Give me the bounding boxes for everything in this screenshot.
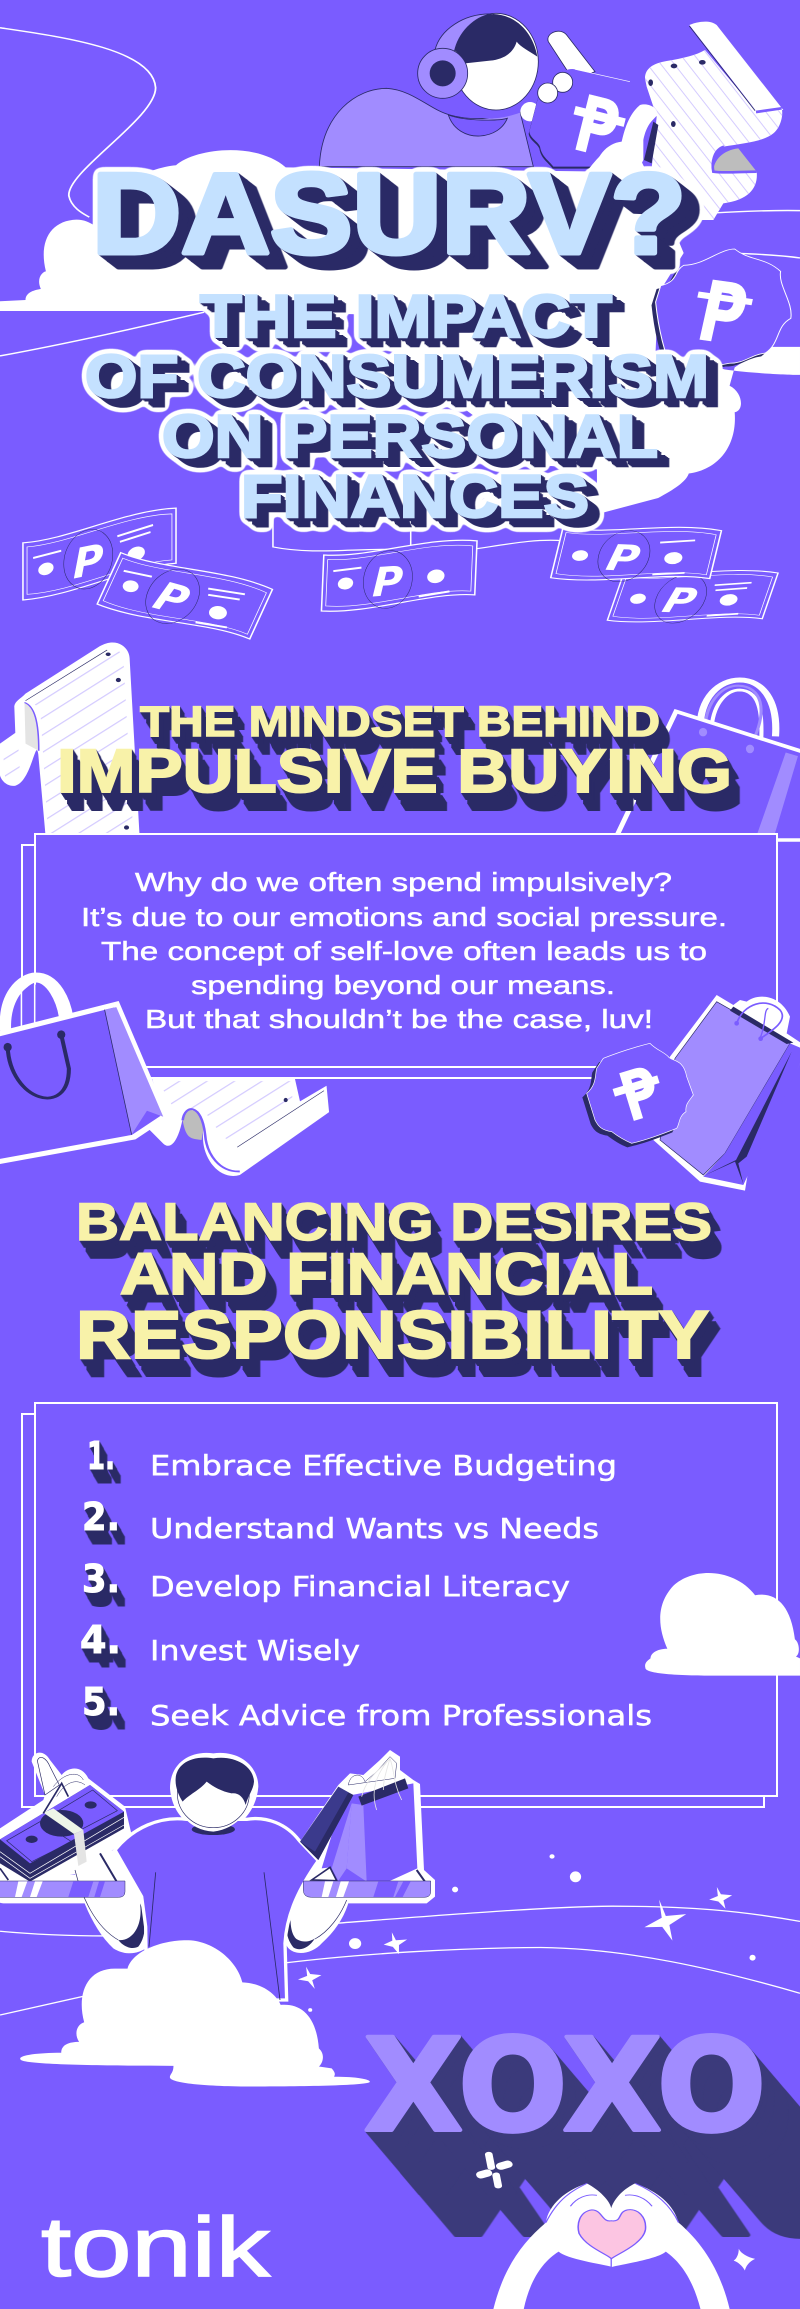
- peso coin: P: [566, 78, 628, 177]
- tip 2: [82, 1495, 599, 1545]
- tip 4: 4.: [80, 1618, 121, 1662]
- tip 5: [82, 1680, 652, 1732]
- head: [192, 1824, 235, 1835]
- XOXO lettering with long shadow: XOXO: [364, 2012, 766, 2161]
- knuckles: [538, 72, 573, 103]
- subtitle line 1: THE IMPACT: [200, 283, 612, 350]
- bag: [653, 995, 800, 1191]
- subtitle line 2: OF CONSUMERISM: [85, 343, 709, 410]
- tip 5: 5.: [82, 1680, 120, 1724]
- left scale plate: [0, 1881, 125, 1897]
- banknote 5: [550, 523, 722, 585]
- tip 5: Seek Advice from Professionals: [150, 1699, 652, 1732]
- panel body text: [81, 867, 727, 1034]
- small diamond sparkle: [734, 2249, 755, 2270]
- cloud behind title: [0, 143, 800, 646]
- tip 4: Invest Wisely: [150, 1634, 360, 1667]
- neck band and collar: [448, 115, 507, 136]
- illustrations behind panel one: [0, 642, 800, 840]
- heart hands: [492, 2183, 731, 2309]
- right hand with phone edge: [593, 104, 658, 180]
- right scale plate: [303, 1881, 431, 1897]
- shirt: [115, 1819, 318, 2000]
- clouds in front of person: [20, 1940, 370, 2087]
- banknote 2: [97, 547, 273, 646]
- headphones: [435, 14, 492, 52]
- banknote 2: P: [147, 573, 196, 624]
- banknote 1: [23, 506, 176, 602]
- heading: balancing desires and financial responsibility: [76, 1193, 712, 1373]
- tip 3: Develop Financial Literacy: [150, 1570, 570, 1603]
- panel body text: But that shouldn’t be the case, luv!: [145, 1004, 653, 1034]
- peso coin: [529, 69, 647, 178]
- person holding coin and receipt: [319, 13, 783, 220]
- tip 1: [87, 1434, 617, 1482]
- heading: the mindset behind impulsive buying: [57, 698, 732, 805]
- banknote 6: [607, 568, 779, 625]
- tip 3: [82, 1557, 570, 1603]
- title line: DASURV?: DASURV?: [92, 151, 686, 278]
- shopping bag top right: [615, 680, 800, 840]
- closing illustration: [475, 2152, 755, 2309]
- white outline silhouette: [0, 1750, 435, 1953]
- sparkle cross: [475, 2152, 514, 2189]
- heading line 1: BALANCING DESIRES: [76, 1193, 712, 1252]
- panel body text: spending beyond our means.: [191, 970, 615, 1000]
- heading line 1: THE MINDSET BEHIND: [140, 698, 660, 746]
- banknote back centre: [411, 488, 564, 554]
- tonik logo: tonik: [41, 2200, 271, 2294]
- illustrations over panel one: [0, 977, 329, 1176]
- tip 1: 1.: [87, 1434, 115, 1478]
- shopping bag on right hand: [300, 1757, 425, 1882]
- money stack: [0, 1783, 124, 1882]
- large peso coin: [652, 249, 791, 377]
- receipt bottom: [149, 1079, 329, 1176]
- banknote 3: P: [372, 557, 404, 606]
- panel body text: It’s due to our emotions and social pressure.: [81, 902, 727, 932]
- banknote 3: [321, 539, 477, 613]
- heading line 2: IMPULSIVE BUYING: [57, 737, 732, 805]
- receipt: [645, 22, 783, 220]
- raised finger: [548, 31, 595, 80]
- heading line 3: RESPONSIBILITY: [76, 1297, 709, 1373]
- cloud right of list: [645, 1573, 800, 1676]
- body: [319, 88, 533, 167]
- tip 4: [80, 1618, 360, 1667]
- subtitle line 3: ON PERSONAL: [162, 403, 658, 470]
- receipt top left: [0, 642, 140, 840]
- banknote back left: [273, 484, 426, 560]
- large peso coin: P: [689, 263, 756, 365]
- banknote 6: P: [658, 581, 702, 621]
- raised finger and hand: [37, 1757, 59, 1795]
- title: [85, 151, 709, 530]
- peso coin: P: [611, 1052, 670, 1138]
- head: [454, 13, 538, 110]
- subtitle line 4: FINANCES: [241, 463, 589, 530]
- right arm: [286, 1900, 347, 1949]
- heading line 2: AND FINANCIAL: [120, 1242, 653, 1307]
- peso coin: [582, 1043, 693, 1147]
- panel: impulsive buying explanation: [22, 834, 777, 1078]
- panel: five tips list: [22, 1403, 777, 1807]
- person balancing money and shopping: [0, 1750, 435, 2000]
- tip 3: 3.: [82, 1557, 120, 1601]
- panel body text: Why do we often spend impulsively?: [135, 867, 672, 897]
- panel body text: The concept of self-love often leads us to: [101, 936, 707, 966]
- tip 1: Embrace Effective Budgeting: [150, 1449, 617, 1482]
- left arm: [75, 1853, 145, 1948]
- tip 2: Understand Wants vs Needs: [150, 1512, 599, 1545]
- shopping bag and coin lower right: [582, 995, 800, 1191]
- shopping bag lower left: [0, 977, 164, 1162]
- flowing lines, stars and dots: [0, 1854, 800, 2015]
- decorative swirl lines: [0, 28, 800, 356]
- banknote 1: P: [73, 536, 104, 589]
- tip 2: 2.: [82, 1495, 120, 1539]
- banknote 5: P: [603, 537, 644, 580]
